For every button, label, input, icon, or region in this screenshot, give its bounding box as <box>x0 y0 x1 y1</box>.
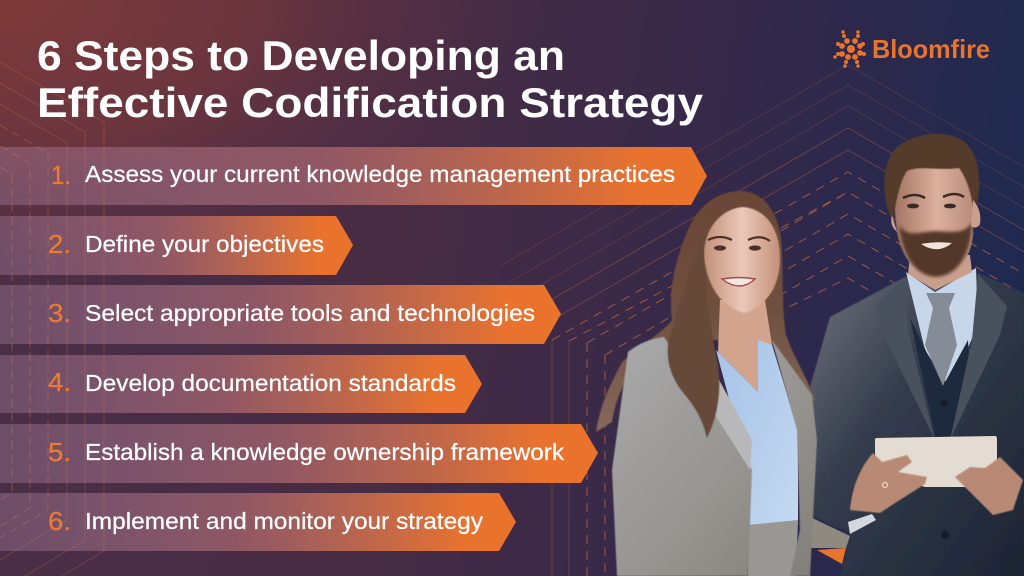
step 2: Define your objectives <box>85 231 324 257</box>
orange accent behind people <box>817 548 846 564</box>
step 1: 1. <box>51 160 71 190</box>
step 1: Assess your current knowledge management practices <box>85 161 675 187</box>
ears <box>891 200 980 232</box>
brows and eyes <box>708 237 770 241</box>
step 3: 3. <box>48 298 71 328</box>
skirt <box>748 520 798 576</box>
step 5: 5. <box>48 437 71 467</box>
wordmark: Bloomfire <box>872 34 990 64</box>
face <box>893 160 973 277</box>
step 6 <box>0 493 516 551</box>
neck <box>718 300 772 392</box>
beard <box>899 222 972 277</box>
step 6: 6. <box>48 506 71 536</box>
title: 6 Steps to Developing an <box>37 32 565 79</box>
suit <box>810 273 1024 576</box>
wedding ring <box>882 482 888 488</box>
icon: sunburst of dots <box>833 30 866 68</box>
step 3: Select appropriate tools and technologies <box>85 300 535 326</box>
mouth <box>921 242 952 249</box>
step 4: Develop documentation standards <box>85 370 456 396</box>
lapels <box>875 274 1007 440</box>
right hand <box>955 457 1023 515</box>
step 5: Establish a knowledge ownership framework <box>85 439 565 465</box>
step 1 <box>0 147 707 205</box>
face <box>704 207 780 313</box>
background chevron line pattern: left <box>0 62 104 576</box>
tie <box>925 293 957 386</box>
step 4 <box>0 355 482 413</box>
step 6: Implement and monitor your strategy <box>85 508 484 534</box>
step 2 <box>0 216 353 275</box>
lapel <box>712 378 752 470</box>
sleeve cuff <box>848 514 876 534</box>
shirt <box>716 340 798 526</box>
shirt and collar <box>906 268 978 388</box>
tablet <box>875 436 997 487</box>
title: Effective Codification Strategy <box>37 79 704 126</box>
background chevron line pattern: right <box>500 65 1024 576</box>
step 4: 4. <box>48 367 71 397</box>
neck <box>908 255 972 290</box>
hair back <box>596 191 815 432</box>
title <box>37 32 704 126</box>
step 5 <box>0 424 598 483</box>
left hand <box>850 453 927 513</box>
vest and jacket buttons <box>940 400 949 539</box>
logo: Bloomfire <box>833 30 990 68</box>
front hair lock <box>668 235 719 438</box>
step 3 <box>0 285 561 344</box>
smile <box>722 278 755 286</box>
vest <box>910 318 970 440</box>
photo: man <box>808 134 1024 576</box>
brows and eyes <box>903 194 964 198</box>
woman's jacket hem behind arm <box>808 516 850 548</box>
jacket <box>612 337 817 576</box>
photo: woman <box>596 191 817 576</box>
step 2: 2. <box>48 229 71 259</box>
hair <box>884 134 979 218</box>
